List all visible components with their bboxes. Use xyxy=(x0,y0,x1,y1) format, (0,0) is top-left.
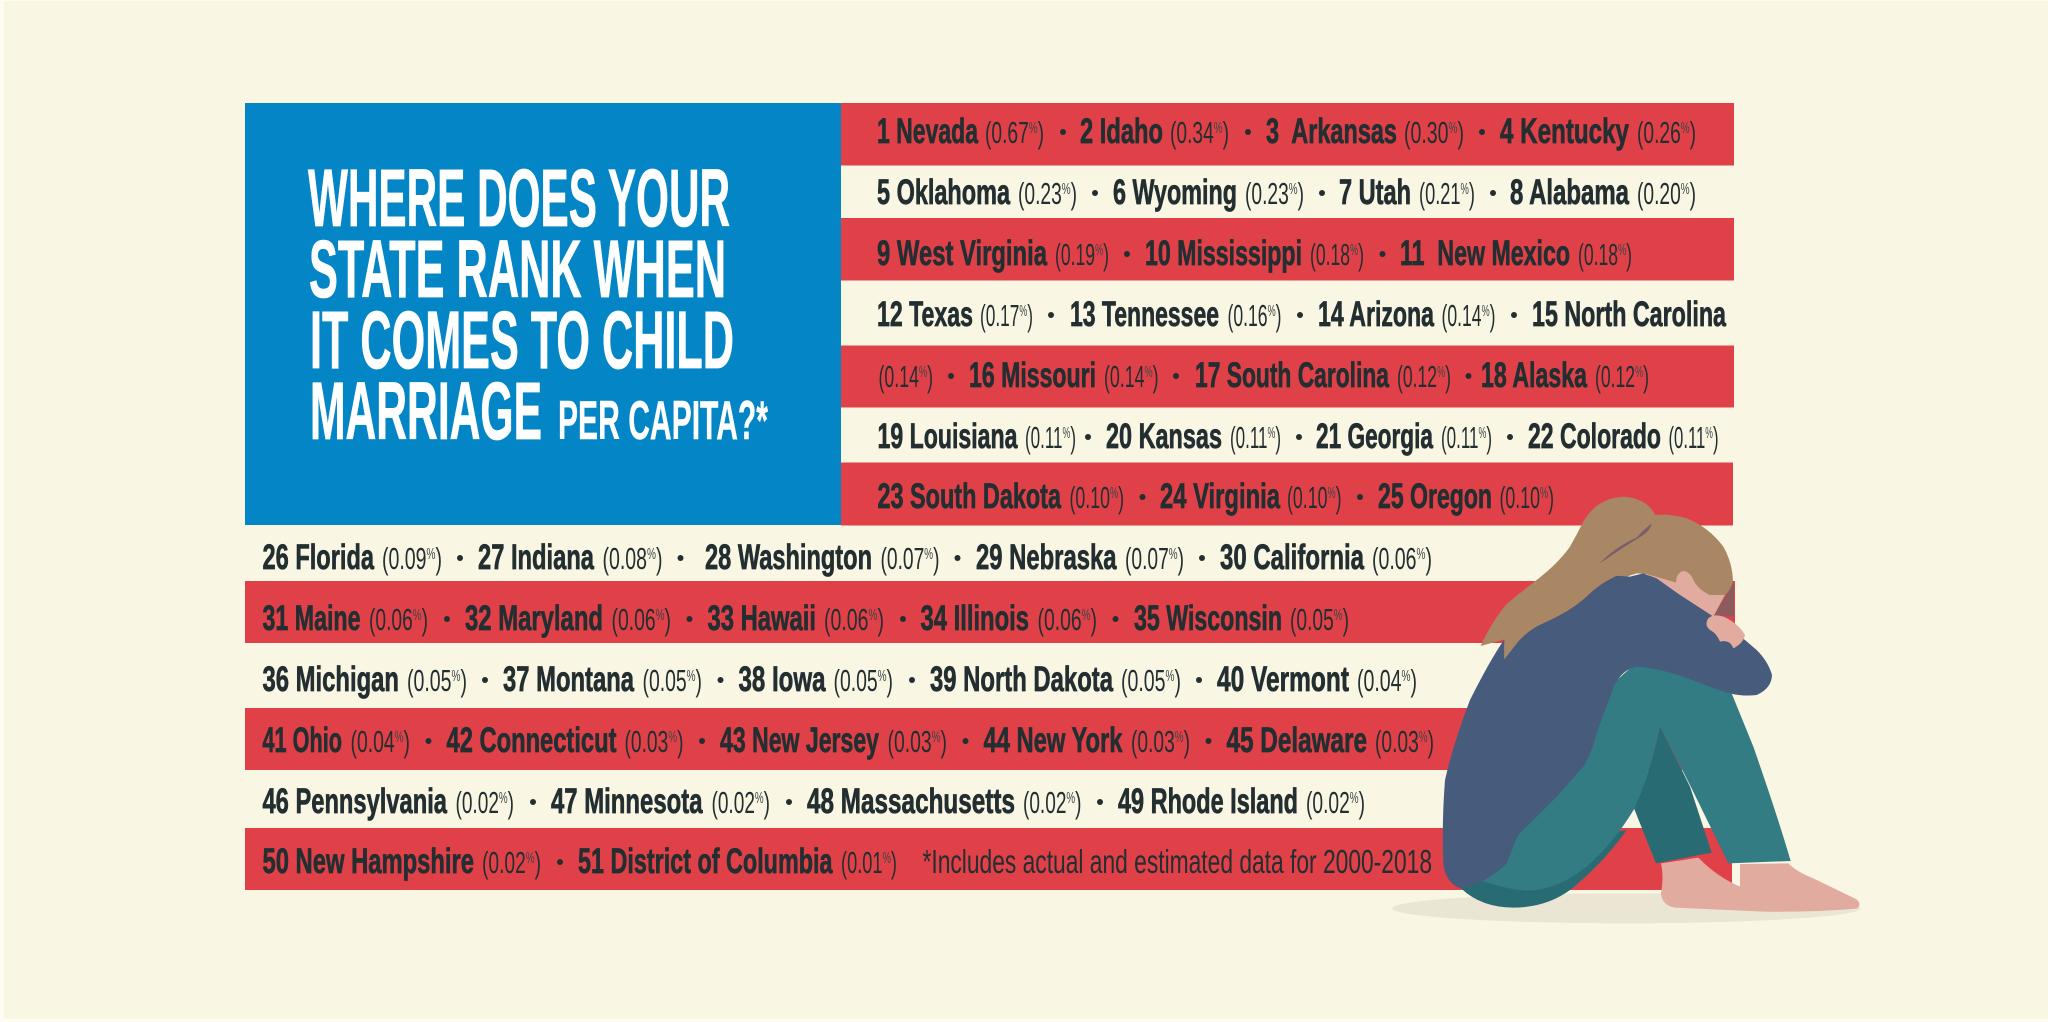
row: ranks 31-35: ) xyxy=(1091,602,1097,637)
row: ranks 5-8: ) xyxy=(1469,176,1475,211)
row: ranks 23-25: 23 South Dakota xyxy=(878,477,1061,516)
row: ranks 9-11: 11 New Mexico xyxy=(1400,234,1570,273)
row: ranks 46-49: (0.02 xyxy=(1306,785,1377,820)
row: ranks 31-35: (0.06 xyxy=(369,602,440,637)
row: ranks 1-4: ) xyxy=(1038,115,1044,150)
row: ranks 50-51 and footnote xyxy=(262,842,1432,881)
shaded patch beside face xyxy=(1713,582,1734,617)
row: ranks 26-30: (0.08 xyxy=(602,541,673,576)
row: ranks 19-22: 20 Kansas xyxy=(1106,417,1222,456)
dark teal seat xyxy=(1460,830,1627,908)
row: ranks 36-40: ) xyxy=(1410,663,1417,698)
row: ranks 5-8: (0.23 xyxy=(1018,176,1089,211)
row: ranks 31-35: (0.06 xyxy=(1038,602,1108,637)
row: ranks 41-45: (0.03 xyxy=(1131,724,1202,759)
row: ranks 36-40: (0.05 xyxy=(642,663,713,698)
row: ranks 41-45: 45 Delaware xyxy=(1226,721,1367,760)
row: ranks 15 continued to 18: ) xyxy=(1445,359,1451,394)
row: ranks 9-11: ) xyxy=(1358,237,1364,272)
title: MARRIAGE xyxy=(310,366,542,457)
row: ranks 23-25: ) xyxy=(1118,480,1124,515)
row: ranks 15 continued to 18: (0.14 xyxy=(878,359,949,394)
row: ranks 41-45: ) xyxy=(404,724,410,759)
row: ranks 46-49: 46 Pennsylvania xyxy=(262,782,447,821)
row: ranks 36-40: % xyxy=(1166,668,1174,685)
row: ranks 26-30: (0.09 xyxy=(382,541,453,576)
row: ranks 41-45: ) xyxy=(677,724,684,759)
row: ranks 5-8: (0.20 xyxy=(1637,176,1708,211)
row: ranks 1-4: 2 Idaho xyxy=(1080,112,1163,151)
row: ranks 12-15: (0.16 xyxy=(1228,298,1298,333)
row: ranks 36-40: % xyxy=(452,668,460,685)
row: ranks 15 continued to 18: % xyxy=(1144,364,1153,381)
row: ranks 12-15: % xyxy=(1482,303,1490,320)
hand xyxy=(1707,615,1745,648)
floor shadow xyxy=(1392,893,1860,923)
row: ranks 26-30: % xyxy=(1417,546,1425,563)
row: ranks 9-11: (0.18 xyxy=(1578,237,1649,272)
row: ranks 1-4: (0.67 xyxy=(985,115,1056,150)
row: ranks 41-45 xyxy=(262,721,1434,760)
row: ranks 23-25: % xyxy=(1540,485,1548,502)
row: ranks 26-30: % xyxy=(647,546,656,563)
row: ranks 46-49: ) xyxy=(1359,785,1365,820)
row: ranks 36-40: (0.05 xyxy=(834,663,904,698)
row: ranks 19-22: 21 Georgia xyxy=(1316,417,1433,456)
row: ranks 1-4: (0.34 xyxy=(1170,115,1241,150)
row: ranks 26-30: 30 California xyxy=(1220,538,1364,577)
row: ranks 46-49: 47 Minnesota xyxy=(551,782,703,821)
row: ranks 46-49: 48 Massachusetts xyxy=(807,782,1015,821)
row: ranks 5-8: (0.23 xyxy=(1245,176,1316,211)
row: ranks 23-25: (0.10 xyxy=(1070,480,1140,515)
row: ranks 26-30: 26 Florida xyxy=(262,538,374,577)
row: ranks 1-4: % xyxy=(1449,120,1457,137)
row: ranks 26-30: ) xyxy=(933,541,940,576)
row: ranks 31-35: ) xyxy=(1343,602,1349,637)
row: ranks 19-22: (0.11 xyxy=(1441,420,1509,455)
row: ranks 31-35: 33 Hawaii xyxy=(708,599,816,638)
row: ranks 36-40: ) xyxy=(887,663,893,698)
row: ranks 31-35: % xyxy=(656,607,665,624)
row: ranks 9-11: ) xyxy=(1103,237,1109,272)
row: ranks 41-45: % xyxy=(395,729,404,746)
row: ranks 36-40: % xyxy=(1402,668,1410,685)
row: ranks 41-45: 44 New York xyxy=(984,721,1123,760)
row: ranks 12-15: % xyxy=(1019,303,1027,320)
row: ranks 12-15: 15 North Carolina xyxy=(1532,295,1726,334)
row: ranks 41-45: (0.03 xyxy=(624,724,695,759)
row: ranks 9-11: 9 West Virginia xyxy=(877,234,1047,273)
row: ranks 1-4: % xyxy=(1681,120,1690,137)
row: ranks 41-45: % xyxy=(1175,729,1184,746)
row: ranks 31-35: % xyxy=(413,607,422,624)
row: ranks 9-11: 10 Mississippi xyxy=(1145,234,1302,273)
row: ranks 15 continued to 18: ) xyxy=(1153,359,1158,394)
far leg xyxy=(1634,726,1712,863)
row: ranks 26-30: ) xyxy=(656,541,662,576)
row: ranks 41-45: 41 Ohio xyxy=(262,721,342,760)
row: ranks 50-51 and footnote: ) xyxy=(535,845,541,880)
row: ranks 46-49: 49 Rhode Island xyxy=(1118,782,1298,821)
row: ranks 46-49: % xyxy=(1066,790,1075,807)
row: ranks 12-15: ) xyxy=(1027,298,1033,333)
hair xyxy=(1481,497,1733,659)
row: ranks 31-35: 34 Illinois xyxy=(920,599,1029,638)
row: ranks 41-45: ) xyxy=(1428,724,1434,759)
row: ranks 41-45: % xyxy=(668,729,677,746)
row: ranks 19-22 xyxy=(878,417,1718,456)
row: ranks 50-51 and footnote: (0.01 xyxy=(841,845,912,880)
row: ranks 36-40: ) xyxy=(460,663,467,698)
row: ranks 15 continued to 18: 18 Alaska xyxy=(1481,356,1587,395)
row: ranks 5-8: % xyxy=(1289,181,1298,198)
row: ranks 5-8: ) xyxy=(1071,176,1077,211)
row: ranks 5-8: 7 Utah xyxy=(1339,173,1411,212)
row: ranks 46-49: (0.02 xyxy=(1023,785,1094,820)
row: ranks 31-35: (0.06 xyxy=(612,602,682,637)
row: ranks 15 continued to 18: (0.12 xyxy=(1595,359,1666,394)
row: ranks 26-30: ) xyxy=(1178,541,1184,576)
row: ranks 15 continued to 18: % xyxy=(1437,364,1445,381)
row: ranks 19-22: % xyxy=(1705,425,1713,442)
row: ranks 46-49: ) xyxy=(508,785,514,820)
row: ranks 26-30: ) xyxy=(1425,541,1432,576)
row: ranks 46-49: ) xyxy=(1075,785,1082,820)
row: ranks 19-22: 19 Louisiana xyxy=(878,417,1018,456)
row: ranks 12-15: ) xyxy=(1276,298,1282,333)
row: ranks 12-15 xyxy=(877,295,1726,334)
row: ranks 1-4: ) xyxy=(1690,115,1696,150)
sweater xyxy=(1443,573,1772,888)
row: ranks 41-45: ) xyxy=(941,724,947,759)
row: ranks 19-22: (0.11 xyxy=(1668,420,1737,455)
row: ranks 9-11: % xyxy=(1618,242,1626,259)
row: ranks 26-30: (0.07 xyxy=(1125,541,1196,576)
row: ranks 31-35: (0.06 xyxy=(824,602,895,637)
row: ranks 19-22: ) xyxy=(1486,420,1492,455)
row: ranks 46-49: ) xyxy=(764,785,770,820)
row: ranks 31-35: ) xyxy=(665,602,671,637)
row: ranks 9-11 xyxy=(877,234,1632,273)
row: ranks 1-4: % xyxy=(1214,120,1223,137)
row: ranks 5-8: (0.21 xyxy=(1419,176,1490,211)
row: ranks 23-25: (0.10 xyxy=(1287,480,1358,515)
row: ranks 41-45: % xyxy=(1419,729,1428,746)
row: ranks 26-30: 28 Washington xyxy=(705,538,872,577)
row: ranks 36-40: 39 North Dakota xyxy=(930,660,1113,699)
row: ranks 12-15: (0.14 xyxy=(1442,298,1512,333)
row: ranks 26-30: % xyxy=(924,546,933,563)
row: ranks 9-11: % xyxy=(1350,242,1358,259)
row: ranks 36-40: % xyxy=(687,668,696,685)
row: ranks 41-45: 42 Connecticut xyxy=(446,721,617,760)
row: ranks 9-11: % xyxy=(1095,242,1103,259)
row: ranks 19-22: ) xyxy=(1070,420,1076,455)
row: ranks 12-15: (0.17 xyxy=(980,298,1051,333)
row: ranks 15 continued to 18: 16 Missouri xyxy=(969,356,1096,395)
row: ranks 1-4: (0.30 xyxy=(1404,115,1475,150)
row: ranks 31-35: ) xyxy=(422,602,428,637)
row: ranks 41-45: (0.03 xyxy=(1375,724,1446,759)
row: ranks 9-11: ) xyxy=(1626,237,1632,272)
row: ranks 1-4: 4 Kentucky xyxy=(1500,112,1629,151)
row: ranks 36-40: 38 Iowa xyxy=(738,660,826,699)
row: ranks 15 continued to 18: ) xyxy=(927,359,933,394)
stripes: red flag bars xyxy=(245,103,1735,890)
row: ranks 15 continued to 18: % xyxy=(1635,364,1643,381)
row: ranks 36-40: (0.05 xyxy=(1121,663,1192,698)
row: ranks 46-49: % xyxy=(499,790,508,807)
row: ranks 31-35: % xyxy=(1082,607,1091,624)
row: ranks 50-51 and footnote: ) xyxy=(891,845,897,880)
row: ranks 9-11: (0.19 xyxy=(1055,237,1126,272)
row: ranks 9-11: (0.18 xyxy=(1310,237,1381,272)
row: ranks 36-40 xyxy=(262,660,1417,699)
row: ranks 31-35: 35 Wisconsin xyxy=(1134,599,1282,638)
row: ranks 15 continued to 18: (0.14 xyxy=(1104,359,1175,394)
row: ranks 19-22: (0.11 xyxy=(1025,420,1093,455)
row: ranks 36-40: ) xyxy=(1174,663,1181,698)
row: ranks 41-45: (0.03 xyxy=(888,724,958,759)
row: ranks 46-49: (0.02 xyxy=(456,785,526,820)
row: ranks 12-15: 12 Texas xyxy=(877,295,973,334)
row: ranks 31-35: 31 Maine xyxy=(262,599,360,638)
row: ranks 26-30: ) xyxy=(435,541,442,576)
row: ranks 50-51 and footnote: % xyxy=(883,850,891,867)
row: ranks 19-22: % xyxy=(1479,425,1486,442)
row: ranks 5-8: 8 Alabama xyxy=(1510,173,1629,212)
row: ranks 12-15: ) xyxy=(1490,298,1496,333)
row: ranks 46-49: % xyxy=(1350,790,1359,807)
row: ranks 5-8: % xyxy=(1062,181,1071,198)
row: ranks 46-49: (0.02 xyxy=(712,785,782,820)
row: ranks 5-8: 5 Oklahoma xyxy=(877,173,1010,212)
row: ranks 5-8: % xyxy=(1681,181,1690,198)
row: ranks 19-22: % xyxy=(1268,425,1275,442)
row: ranks 26-30: % xyxy=(427,546,435,563)
row: ranks 36-40: 36 Michigan xyxy=(262,660,399,699)
row: ranks 36-40: (0.05 xyxy=(407,663,478,698)
row: ranks 23-25: (0.10 xyxy=(1500,480,1570,515)
row: ranks 26-30: 29 Nebraska xyxy=(976,538,1117,577)
row: ranks 36-40: (0.04 xyxy=(1357,663,1428,698)
row: ranks 23-25: ) xyxy=(1548,480,1554,515)
row: ranks 1-4: % xyxy=(1029,120,1038,137)
row: ranks 1-4: ) xyxy=(1457,115,1464,150)
row: ranks 12-15: 14 Arizona xyxy=(1318,295,1434,334)
illustration: seated girl hugging knees xyxy=(1392,497,1860,923)
row: ranks 23-25: 25 Oregon xyxy=(1378,477,1492,516)
row: ranks 36-40: ) xyxy=(696,663,702,698)
title: PER CAPITA?* xyxy=(558,389,768,451)
row: ranks 31-35 xyxy=(262,599,1349,638)
row: ranks 31-35: % xyxy=(1334,607,1343,624)
row: ranks 19-22: (0.11 xyxy=(1230,420,1298,455)
row: ranks 36-40: % xyxy=(878,668,887,685)
row: ranks 26-30: (0.07 xyxy=(880,541,951,576)
row: ranks 23-25: % xyxy=(1327,485,1336,502)
row: ranks 50-51 and footnote: % xyxy=(526,850,535,867)
row: ranks 46-49 xyxy=(262,782,1365,821)
title: WHERE DOES YOUR xyxy=(308,153,730,244)
row: ranks 15 continued to 18: ) xyxy=(1643,359,1649,394)
row: ranks 15 continued to 18 xyxy=(878,356,1649,395)
row: ranks 50-51 and footnote: 51 District of Columbia xyxy=(578,842,833,881)
row: ranks 41-45: 43 New Jersey xyxy=(720,721,879,760)
row: ranks 41-45: % xyxy=(932,729,941,746)
row: ranks 26-30: % xyxy=(1169,546,1178,563)
hair strand xyxy=(1599,523,1652,564)
row: ranks 36-40: 40 Vermont xyxy=(1217,660,1349,699)
row: ranks 5-8: ) xyxy=(1690,176,1696,211)
row: ranks 41-45: (0.04 xyxy=(350,724,421,759)
row: ranks 41-45: ) xyxy=(1184,724,1190,759)
row: ranks 1-4: 1 Nevada xyxy=(877,112,978,151)
row: ranks 15 continued to 18: % xyxy=(919,364,927,381)
row: ranks 23-25: 24 Virginia xyxy=(1160,477,1280,516)
near leg xyxy=(1480,653,1791,891)
row: ranks 31-35: 32 Maryland xyxy=(465,599,603,638)
row: ranks 15 continued to 18: 17 South Carolina xyxy=(1195,356,1389,395)
row: ranks 23-25 xyxy=(878,477,1554,516)
panel: blue canton with title xyxy=(245,103,841,525)
row: ranks 46-49: % xyxy=(755,790,764,807)
row: ranks 31-35: (0.05 xyxy=(1290,602,1361,637)
feet xyxy=(1661,858,1859,912)
row: ranks 23-25: ) xyxy=(1336,480,1342,515)
row: ranks 19-22: % xyxy=(1063,425,1070,442)
row: ranks 5-8 xyxy=(877,173,1696,212)
row: ranks 26-30: 27 Indiana xyxy=(478,538,594,577)
row: ranks 50-51 and footnote: (0.02 xyxy=(482,845,553,880)
row: ranks 12-15: 13 Tennessee xyxy=(1070,295,1219,334)
row: ranks 31-35: ) xyxy=(877,602,884,637)
row: ranks 5-8: 6 Wyoming xyxy=(1113,173,1237,212)
face and ear xyxy=(1640,570,1727,617)
row: ranks 5-8: ) xyxy=(1298,176,1304,211)
row: ranks 26-30: (0.06 xyxy=(1372,541,1443,576)
row: ranks 23-25: % xyxy=(1110,485,1118,502)
title xyxy=(308,153,768,457)
row: ranks 26-30 xyxy=(262,538,1432,577)
row: ranks 1-4: 3 Arkansas xyxy=(1266,112,1397,151)
row: ranks 19-22: 22 Colorado xyxy=(1528,417,1661,456)
row: ranks 36-40: 37 Montana xyxy=(503,660,634,699)
row: ranks 15 continued to 18: (0.12 xyxy=(1397,359,1468,394)
row: ranks 50-51 and footnote: 50 New Hampshire xyxy=(262,842,474,881)
row: ranks 1-4: (0.26 xyxy=(1637,115,1708,150)
row: ranks 5-8: % xyxy=(1461,181,1469,198)
row: ranks 12-15: % xyxy=(1268,303,1276,320)
row: ranks 31-35: % xyxy=(869,607,877,624)
row: ranks 1-4 xyxy=(877,112,1696,151)
row: ranks 1-4: ) xyxy=(1223,115,1229,150)
row: ranks 19-22: ) xyxy=(1713,420,1718,455)
title: STATE RANK WHEN xyxy=(309,224,726,315)
row: ranks 19-22: ) xyxy=(1275,420,1281,455)
title: IT COMES TO CHILD xyxy=(310,295,734,386)
footnote: *Includes actual and estimated data for 2000-2018 xyxy=(922,843,1432,880)
